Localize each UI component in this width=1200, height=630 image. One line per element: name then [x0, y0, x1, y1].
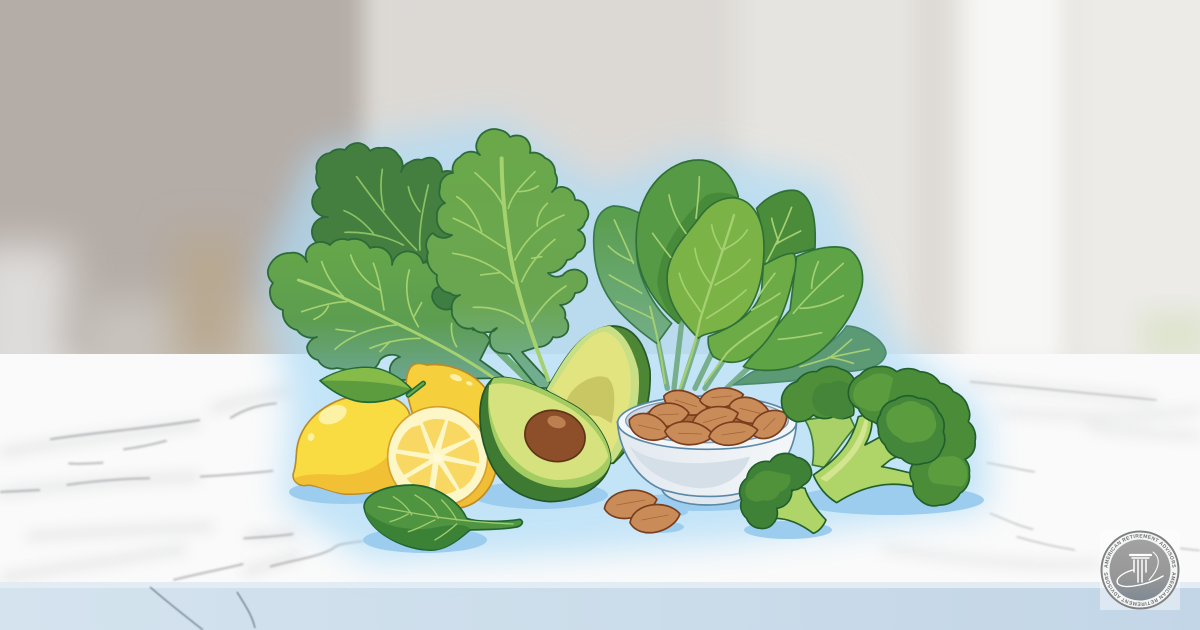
ground shadows: [289, 480, 984, 553]
avocado flesh: [488, 383, 608, 480]
marble counter top: [0, 354, 1200, 584]
spinach back top leaf: [636, 160, 738, 323]
small spinach leaf: [364, 485, 522, 550]
spinach narrow leaf: [708, 253, 796, 362]
logo circular text: AMERICAN RETIREMENT ADVISORS: [1104, 534, 1176, 568]
back lemon: [406, 363, 488, 437]
logo disc: [1110, 540, 1170, 600]
loose almond ridges: [617, 500, 668, 520]
bowl rim: [618, 396, 796, 449]
spinach stems: [655, 323, 757, 388]
logo circular text: [1104, 534, 1176, 606]
small spinach leaf veins: [378, 495, 513, 540]
spinach left leaf: [594, 206, 672, 343]
logo backing square: [1100, 530, 1180, 610]
marble counter front edge: [0, 582, 1200, 630]
logo ring: [1102, 532, 1178, 608]
spinach bunch: [594, 160, 886, 388]
logo badge: American Retirement Advisors: [1100, 530, 1180, 610]
back avocado half: [547, 326, 650, 463]
main broccoli stem: [813, 413, 913, 503]
spinach centre shade: [657, 193, 737, 323]
front lemon highlights: [306, 401, 350, 442]
avocado pit: [519, 404, 591, 468]
front avocado half: [480, 377, 611, 502]
front lemon shading: [294, 440, 403, 494]
kale lower left leaf: [268, 239, 505, 380]
bowl body: [617, 422, 797, 496]
lemon leaf: [320, 367, 423, 402]
blurred kitchen background: [0, 0, 1200, 395]
kale leaves: [268, 129, 588, 388]
small broccoli crown: [740, 453, 812, 529]
spinach centre leaf: [667, 198, 764, 338]
logo column icon: [1117, 552, 1163, 586]
almonds in bowl: [625, 385, 793, 448]
lemon half body: [420, 413, 497, 508]
back broccoli stem: [805, 413, 855, 467]
front broccoli floret: [877, 396, 945, 465]
lemons: [293, 363, 497, 508]
main broccoli crown: [848, 366, 976, 506]
almond ridges: [638, 396, 775, 435]
spinach right leaf: [743, 247, 863, 370]
bowl foot: [662, 488, 750, 505]
broccoli group: [740, 366, 976, 533]
lemon slice: [388, 407, 488, 507]
back avocado pit hollow: [567, 376, 614, 423]
almond pile base: [643, 400, 770, 437]
front lemon: [293, 394, 410, 494]
small broccoli stem: [775, 487, 826, 533]
spinach veins: [608, 177, 869, 388]
back broccoli crown: [782, 366, 855, 422]
lemon segments: [396, 419, 479, 495]
logo circular text: AMERICAN RETIREMENT ADVISORS: [1104, 572, 1176, 606]
loose almonds: [602, 486, 682, 536]
kale veins: [298, 158, 566, 380]
back lemon highlights: [449, 373, 473, 386]
almond bowl: [602, 385, 797, 536]
kale dark curl: [432, 284, 481, 310]
kale back dark leaf: [312, 143, 453, 268]
spinach back right leaf: [757, 190, 815, 265]
spinach lower right leaf: [733, 326, 886, 385]
kale stems: [492, 345, 545, 385]
blue glow behind food: [262, 118, 988, 562]
kale upper right leaf: [426, 129, 588, 388]
